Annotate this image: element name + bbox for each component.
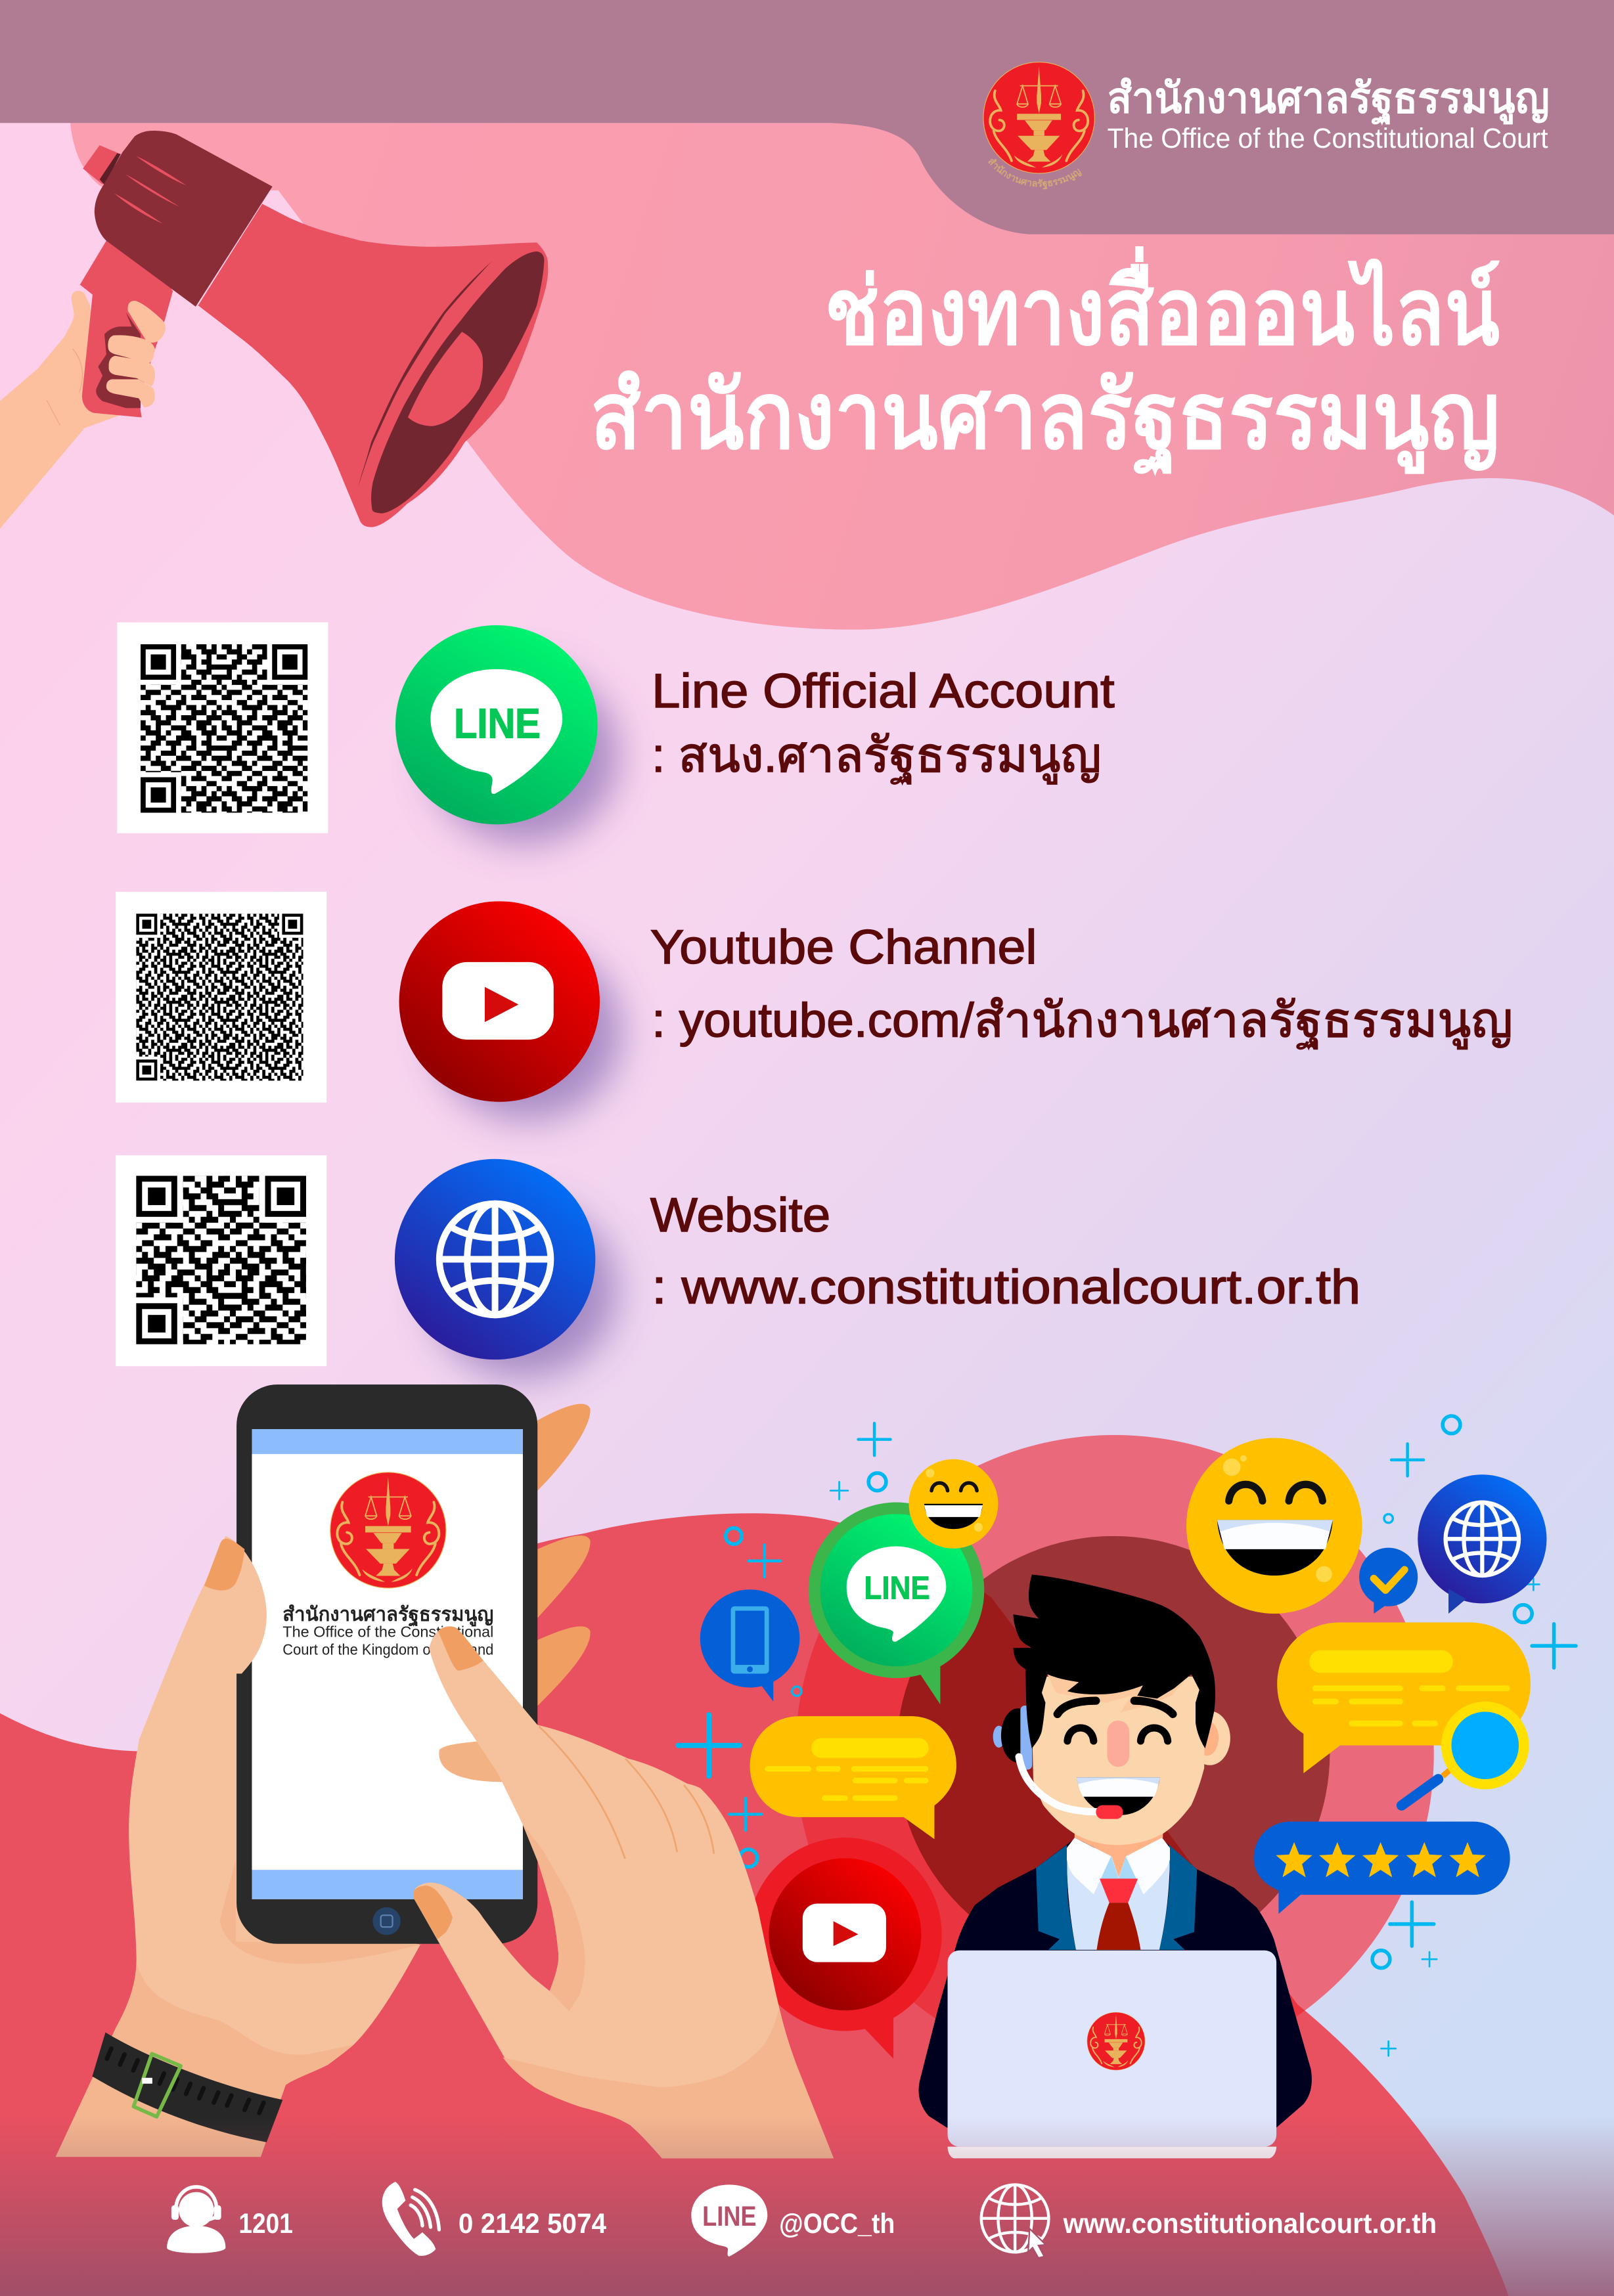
eyes — [1067, 1728, 1168, 1741]
icon: LINE bubble — [691, 2185, 767, 2257]
screen text: Court of the Kingdom of Thailand — [282, 1641, 493, 1658]
wrist creases — [47, 349, 83, 426]
lapels — [1036, 1845, 1197, 1950]
chat bubble: check — [1359, 1548, 1418, 1614]
hand shadow between thumb and index — [522, 1824, 585, 2011]
laptop logo — [1087, 2012, 1145, 2070]
screen bottom bar — [252, 1870, 523, 1899]
chat bubble: yellow left — [750, 1716, 956, 1839]
icon: LINE round button: LINE — [454, 701, 541, 747]
wrist shadow — [503, 2008, 834, 2158]
thumb — [128, 301, 166, 343]
emblem: constitutional court seal — [983, 62, 1095, 189]
footer: hotline 1201 — [167, 2187, 293, 2253]
forehead shadow — [1047, 1673, 1191, 1713]
footer band — [0, 2116, 1614, 2296]
salmon wave behind title — [70, 123, 1614, 630]
QR code: LINE — [117, 623, 328, 833]
shirt — [1067, 1848, 1170, 1950]
palm shadow — [56, 1860, 422, 2157]
emoji small — [908, 1459, 998, 1549]
footer: hotline 1201: 1201 — [238, 2208, 293, 2239]
laptop — [948, 1951, 1276, 2158]
footer: telephone number — [382, 2182, 606, 2256]
thin mouth line — [359, 261, 492, 485]
arm and hand — [0, 291, 122, 529]
mouth — [1077, 1777, 1160, 1815]
microphone — [1096, 1805, 1123, 1819]
text: LINE account: : สนง.ศาลรัฐธรรมนูญ — [652, 728, 1102, 784]
screen text: สำนักงานศาลรัฐธรรมนูญ — [282, 1604, 493, 1627]
emblem: constitutional court seal: สำนักงานศาลรัฐธรรมนูญ — [988, 159, 1082, 189]
thumb nail — [413, 1886, 453, 1939]
chat bubble: YouTube — [748, 1838, 942, 2059]
chat bubble: phone — [700, 1589, 799, 1702]
red hill shape — [0, 1513, 1508, 2296]
suit — [919, 1841, 1312, 2128]
megaphone inner highlight — [408, 332, 483, 426]
eyebrows — [1058, 1701, 1173, 1714]
megaphone back tip — [83, 145, 121, 185]
handle grip — [96, 313, 141, 408]
hair — [1013, 1574, 1215, 1748]
screen logo — [330, 1472, 446, 1588]
vent slits — [114, 156, 187, 224]
screen top bar — [252, 1429, 523, 1454]
inner ear — [1195, 1721, 1219, 1755]
screen text — [282, 1604, 493, 1658]
text: website: : www.constitutionalcourt.or.th — [652, 1259, 1360, 1314]
text: YouTube channel: : youtube.com/สำนักงานศาลรัฐธรรมนูญ — [652, 993, 1513, 1049]
chat bubble: LINE: LINE — [864, 1571, 930, 1606]
nose — [1108, 1721, 1129, 1767]
fingers — [106, 335, 155, 408]
QR code: YouTube — [116, 892, 326, 1103]
header band — [0, 0, 1614, 234]
chat bubble: LINE — [809, 1503, 984, 1704]
icon: globe round button — [395, 1159, 617, 1378]
tie knot — [1100, 1879, 1138, 1903]
screen text: The Office of the Constitutional — [282, 1623, 493, 1641]
microphone arm — [1019, 1757, 1098, 1812]
text: LINE account — [652, 663, 1115, 784]
face — [1031, 1677, 1205, 1845]
neck — [1075, 1828, 1163, 1877]
background circle dark — [897, 1536, 1330, 1970]
icon: headset person — [167, 2187, 225, 2253]
emoji large — [1186, 1438, 1362, 1614]
knuckle creases — [539, 1727, 714, 1859]
chat bubble: globe — [1418, 1474, 1546, 1614]
hand — [413, 1628, 834, 2158]
headset blue ear — [993, 1726, 1004, 1748]
header logo and organisation name — [983, 62, 1550, 189]
illustration: right hand touching phone — [413, 1626, 834, 2158]
organisation name in Thai: สำนักงานศาลรัฐธรรมนูญ — [1108, 74, 1550, 125]
footer: telephone number: 0 2142 5074 — [459, 2208, 606, 2239]
megaphone handle — [80, 241, 173, 417]
index nail — [438, 1626, 483, 1671]
teeth — [1077, 1778, 1160, 1797]
tip collar — [100, 153, 121, 185]
home button — [372, 1907, 401, 1935]
illustration: customer support man — [919, 1574, 1312, 2128]
back finger over phone — [439, 1738, 505, 1782]
icon: globe with cursor — [981, 2185, 1048, 2258]
back fingers — [537, 1404, 591, 1706]
chat bubble: five stars — [1254, 1822, 1510, 1914]
QR code: website — [116, 1155, 326, 1366]
left thumb nail — [204, 1539, 244, 1591]
chat bubble: yellow right — [1277, 1622, 1531, 1773]
phone body — [236, 1384, 537, 1944]
megaphone cone — [198, 204, 548, 527]
phone screen — [252, 1429, 523, 1899]
text: website — [650, 1187, 1360, 1314]
text: YouTube channel — [650, 919, 1513, 1049]
text: YouTube channel: Youtube Channel — [650, 919, 1037, 974]
teeth shade — [1077, 1777, 1160, 1784]
icon: YouTube round button — [399, 901, 621, 1120]
megaphone back block — [95, 131, 273, 307]
footer: website: www.constitutionalcourt.or.th — [1063, 2208, 1437, 2239]
footer: LINE id — [691, 2185, 895, 2257]
text: website: Website — [650, 1187, 830, 1242]
title line two: สำนักงานศาลรัฐธรรมนูญ — [591, 364, 1500, 477]
wristband — [92, 2033, 282, 2142]
title line one: ช่องทางสื่อออนไลน์ — [824, 246, 1500, 364]
footer: website — [981, 2185, 1437, 2258]
icon: megaphone held by hand — [0, 131, 548, 529]
background circle pink — [796, 1435, 1434, 2073]
headset left cup — [1001, 1708, 1035, 1763]
text: LINE account: Line Official Account — [652, 663, 1115, 718]
shirt opening — [1100, 1857, 1138, 1879]
headset band — [1020, 1706, 1032, 1769]
tie — [1097, 1903, 1140, 1950]
megaphone mouth interior — [371, 252, 544, 514]
right ear — [1189, 1711, 1230, 1765]
icon: LINE bubble: LINE — [702, 2201, 757, 2232]
collar — [1067, 1838, 1170, 1894]
illustration: hand holding phone — [56, 1384, 591, 2157]
icon: magnifying glass — [1402, 1702, 1529, 1805]
footer: LINE id: @OCC_th — [779, 2208, 895, 2239]
circle overlap colours — [797, 1592, 1305, 2019]
icon: telephone — [382, 2182, 439, 2256]
organisation name in English: The Office of the Constitutional Court — [1108, 123, 1548, 154]
icon: LINE round button — [395, 625, 618, 843]
title — [591, 246, 1500, 477]
palm — [56, 1536, 420, 2157]
left thumb — [205, 1536, 267, 1673]
decorative plus signs and circles — [678, 1416, 1576, 2056]
